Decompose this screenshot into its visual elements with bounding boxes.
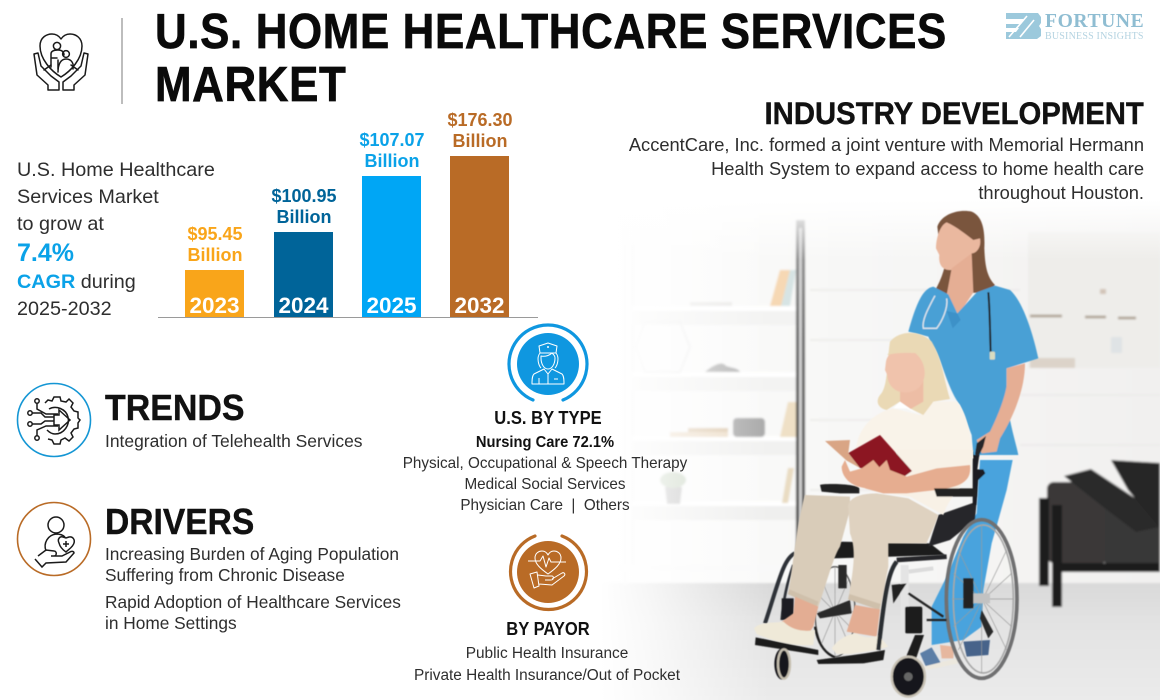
value 2024: Billion [276, 207, 332, 227]
bar 2025 [362, 176, 421, 318]
heading: industry development: INDUSTRY DEVELOPMENT [765, 95, 1144, 131]
value 2023: $95.45 [187, 224, 243, 244]
icon: by payor [508, 534, 588, 612]
logo: Fortune Business Insights: BUSINESS INSIGHTS [1045, 31, 1144, 42]
heading: by payor: BY PAYOR [506, 619, 590, 639]
value 2025: Billion [364, 151, 420, 171]
nurse lower body and wheelchair, crop-scaled [765, 450, 1013, 670]
text: by type segments [403, 455, 688, 514]
text: CAGR statement: CAGR during [17, 271, 136, 293]
senior woman lower body, book and hands [754, 435, 1017, 697]
text: drivers: in Home Settings [105, 613, 237, 633]
value 2025 [359, 130, 425, 171]
bar 2023 [185, 270, 244, 318]
room background [590, 190, 1160, 700]
logo: Fortune Business Insights [1006, 11, 1144, 42]
text: CAGR statement: Services Market [17, 186, 159, 208]
value 2025: $107.07 [359, 130, 425, 150]
heading: drivers: DRIVERS [105, 501, 254, 542]
text: by type segments: Physician Care | Others [460, 497, 630, 514]
baseline [158, 317, 538, 318]
value 2023 [187, 224, 243, 265]
text: industry development: throughout Houston. [978, 182, 1144, 203]
bar 2032: 2032 [454, 293, 505, 318]
title: MARKET [155, 58, 346, 112]
icon: heart held by hands [33, 33, 89, 91]
text: CAGR statement: 2025-2032 [17, 298, 112, 320]
value 2032: $176.30 [447, 110, 513, 130]
icon: trends [16, 382, 92, 458]
text: CAGR statement [17, 159, 215, 320]
text: industry development: Health System to expand access to home health care [711, 158, 1144, 179]
text: by type segments: Physical, Occupational & Speech Therapy [403, 455, 687, 472]
value 2024: $100.95 [271, 186, 337, 206]
text: CAGR statement: U.S. Home Healthcare [17, 159, 215, 181]
senior woman upper body [855, 333, 973, 458]
heading: trends: TRENDS [105, 387, 245, 428]
bar 2024 [274, 232, 333, 318]
bar 2024: 2024 [278, 293, 329, 318]
text: industry development: AccentCare, Inc. formed a joint venture with Memorial Hermann [629, 134, 1144, 155]
text: CAGR statement: 7.4% [17, 239, 74, 267]
text: by payor segments: Public Health Insurance [466, 645, 628, 662]
bar 2032 [450, 156, 509, 318]
text: CAGR statement: to grow at [17, 213, 104, 235]
icon: nursing care [507, 323, 589, 402]
bar chart [158, 110, 538, 318]
logo: Fortune Business Insights: FORTUNE [1045, 11, 1144, 32]
text: trends: Integration of Telehealth Services [105, 431, 363, 451]
sofa [1047, 482, 1109, 563]
heading: by type: U.S. BY TYPE [494, 408, 602, 428]
text: by payor segments: Private Health Insurance/Out of Pocket [414, 666, 680, 684]
text: drivers: Increasing Burden of Aging Population [105, 544, 399, 564]
text: by payor segments [414, 645, 680, 684]
value 2032: Billion [452, 131, 508, 151]
text: drivers [105, 544, 401, 633]
divider [121, 18, 123, 104]
photo: nurse and senior woman in wheelchair in a bright room [645, 210, 1160, 700]
text: industry development [629, 134, 1144, 203]
title [155, 5, 947, 112]
bar 2023: 2023 [189, 293, 240, 318]
left fade [600, 200, 770, 700]
bar 2025: 2025 [366, 293, 417, 318]
nursing care share: Nursing Care 72.1% [476, 434, 614, 451]
text: drivers: Suffering from Chronic Disease Rapid Adoption of Healthcare Services [105, 565, 401, 612]
value 2023: Billion [188, 245, 242, 265]
top fade [600, 200, 1160, 260]
value 2032 [447, 110, 513, 151]
title: U.S. HOME HEALTHCARE SERVICES [155, 5, 947, 59]
value 2024 [271, 186, 337, 227]
text: by type segments: Medical Social Services [464, 476, 626, 493]
icon: drivers [16, 502, 92, 576]
nurse upper body [908, 211, 1038, 457]
